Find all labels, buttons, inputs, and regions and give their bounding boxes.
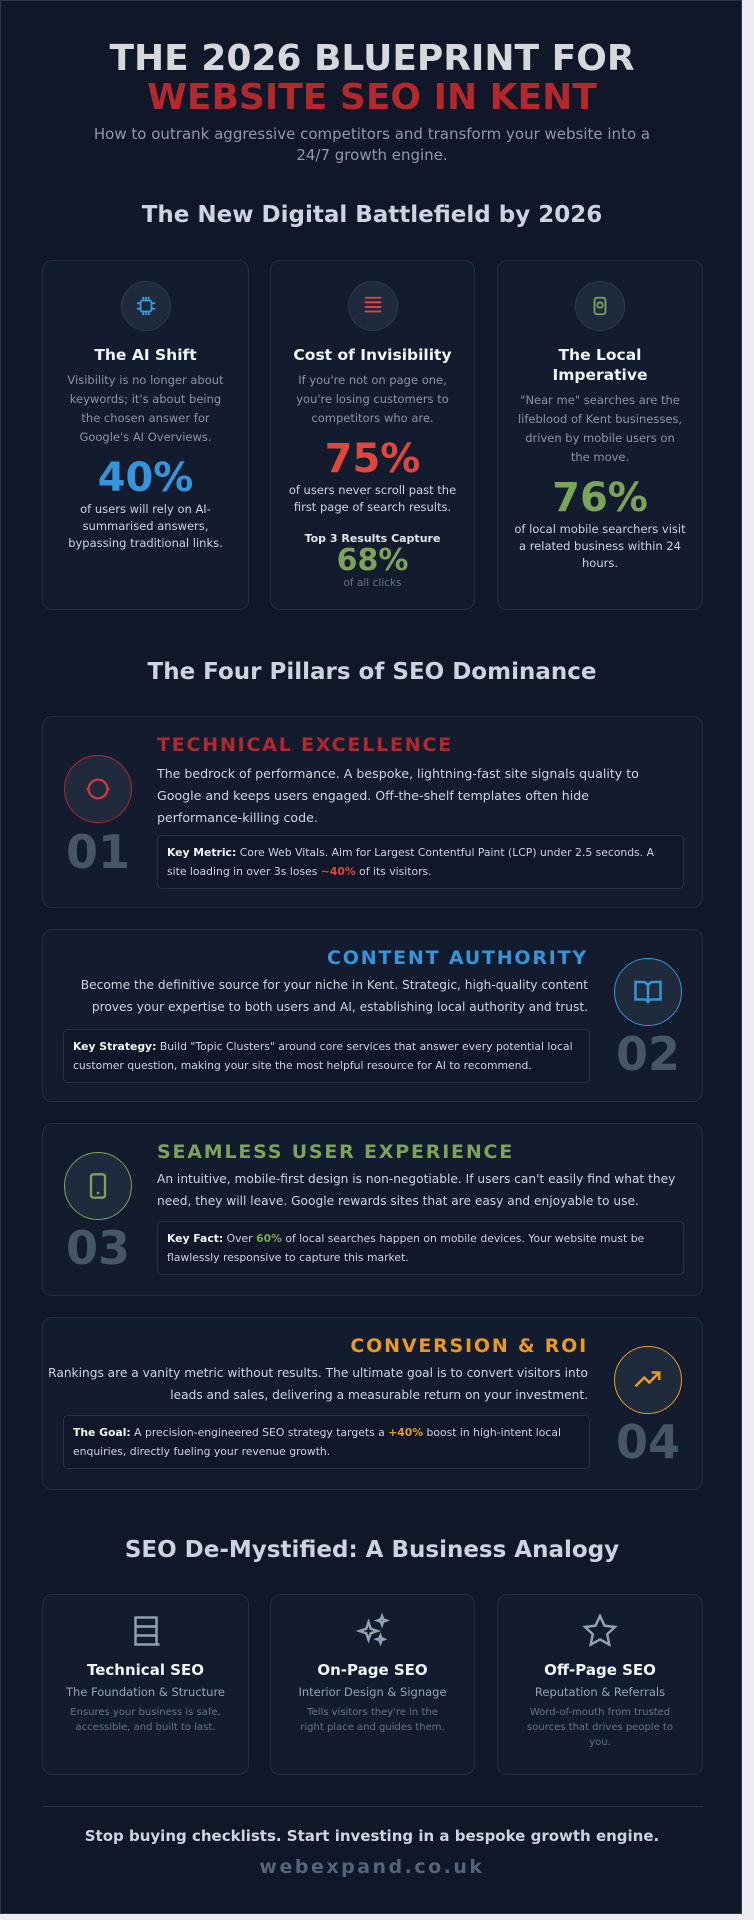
pillar 2: content authority: CONTENT AUTHORITY (327, 947, 588, 969)
card: cost of invisibility: Top 3 Results Capture (305, 532, 440, 545)
heading: analogy: SEO De-Mystified: A Business Analogy (125, 1537, 619, 1563)
icon: sparkles (356, 1613, 390, 1646)
card: local imperative (497, 260, 703, 610)
pillar 2: content authority (42, 929, 703, 1102)
icon: list (348, 281, 398, 331)
pillar 3: seamless UX: SEAMLESS USER EXPERIENCE (157, 1141, 514, 1163)
analogy: off-page SEO: Reputation & Referrals (535, 1685, 665, 1699)
pillar 4: conversion & ROI (42, 1317, 703, 1490)
card: cost of invisibility: Cost of Invisibility (293, 346, 452, 364)
title: WEBSITE SEO IN KENT (147, 77, 597, 118)
card: cost of invisibility (270, 260, 475, 610)
icon: star (582, 1613, 618, 1647)
subtitle: How to outrank aggressive competitors and transform your website into a 24/7 growth engine. (94, 125, 650, 164)
card: local imperative: of local mobile searchers visit a related business within 24 hours. (514, 522, 686, 570)
icon: book (614, 958, 682, 1026)
card: AI shift: The AI Shift (94, 346, 197, 364)
analogy: technical SEO: Technical SEO (87, 1661, 204, 1679)
icon: shelves (134, 1616, 160, 1646)
pillar 1: technical excellence: Key Metric: Core Web Vitals. Aim for Largest Contentful Paint (LCP) under 2.5 seconds. A site loading in over 3s loses ~40% of its visitors. (167, 846, 654, 878)
number 03: 03 (66, 1221, 130, 1275)
title (109, 38, 635, 118)
card: cost of invisibility: of users never scroll past the first page of search results. (289, 483, 456, 514)
number 02: 02 (616, 1027, 680, 1081)
pillar 2: content authority: Become the definitive source for your niche in Kent. Strategic, high-quality content proves your expertise to both users and AI, establishing local authority and trust. (81, 978, 588, 1014)
pillar 3: seamless UX: Key Fact: Over 60% of local searches happen on mobile devices. Your website must be flawlessly responsive to capture this market. (167, 1232, 644, 1264)
card: AI shift: of users will rely on AI-summarised answers, bypassing traditional links. (68, 502, 223, 550)
card: local imperative: The Local (558, 346, 642, 364)
heading: four pillars: The Four Pillars of SEO Dominance (148, 659, 596, 685)
icon: trend (614, 1346, 682, 1414)
pillar 1: technical excellence (42, 716, 703, 908)
card: cost of invisibility: of all clicks (344, 577, 402, 589)
analogy: technical SEO (42, 1594, 249, 1775)
icon: phone location (575, 281, 625, 331)
pillar 4: conversion & ROI: CONVERSION & ROI (350, 1335, 588, 1357)
analogy: on-page SEO: On-Page SEO (317, 1661, 428, 1679)
analogy: off-page SEO: Off-Page SEO (544, 1661, 656, 1679)
number 01: 01 (66, 825, 130, 879)
pillar 3: seamless UX: An intuitive, mobile-first design is non-negotiable. If users can't easily find what they need, they will leave. Google rewards sites that are easy and enjoyable to use. (157, 1172, 675, 1208)
number 04: 04 (616, 1415, 680, 1469)
heading: battlefield: The New Digital Battlefield by 2026 (142, 202, 602, 228)
icon: phone (64, 1152, 132, 1220)
analogy: on-page SEO: Interior Design & Signage (298, 1685, 447, 1699)
pillar 2: content authority: Key Strategy: Build "Topic Clusters" around core services that answer every potential local customer question, making your site the most helpful resource for AI to recommend. (73, 1040, 573, 1072)
footer url: webexpand.co.uk (259, 1856, 485, 1878)
card: AI shift: 40% (98, 455, 193, 501)
analogy: technical SEO: The Foundation & Structure (66, 1685, 225, 1699)
icon: chip (120, 281, 170, 331)
card: cost of invisibility: If you're not on page one, you're losing customers to competitors who are. (296, 373, 449, 425)
analogy: on-page SEO: Tells visitors they're in the right place and guides them. (300, 1707, 445, 1733)
card: AI shift (42, 260, 249, 610)
analogy: off-page SEO (497, 1594, 703, 1775)
analogy: technical SEO: Ensures your business is safe, accessible, and built to last. (70, 1707, 221, 1733)
card: cost of invisibility: 68% (337, 543, 408, 578)
card: AI shift: Visibility is no longer about keywords; it's about being the chosen answer for Google's AI Overviews. (67, 373, 224, 444)
title: THE 2026 BLUEPRINT FOR (109, 38, 635, 79)
analogy: off-page SEO: Word-of-mouth from trusted sources that drives people to you. (527, 1707, 673, 1748)
card: local imperative: 76% (552, 475, 648, 521)
pillar 3: seamless UX (42, 1123, 703, 1296)
pillar 4: conversion & ROI: Rankings are a vanity metric without results. The ultimate goal is to convert visitors into leads and sales, delivering a measurable return on your investment. (48, 1366, 588, 1402)
analogy: on-page SEO (270, 1594, 475, 1775)
card: cost of invisibility: 75% (325, 436, 420, 482)
footer tagline: Stop buying checklists. Start investing in a bespoke growth engine. (85, 1827, 659, 1845)
icon: circle (64, 755, 132, 823)
pillar 4: conversion & ROI: The Goal: A precision-engineered SEO strategy targets a +40% boost in high-intent local enquiries, directly fueling your revenue growth. (73, 1426, 561, 1458)
pillar 1: technical excellence: TECHNICAL EXCELLENCE (157, 734, 453, 756)
card: local imperative: "Near me" searches are the lifeblood of Kent businesses, driven by mobile users on the move. (518, 393, 682, 464)
card: local imperative: Imperative (553, 366, 647, 384)
pillar 1: technical excellence: The bedrock of performance. A bespoke, lightning-fast site signals quality to Google and keeps users engaged. Off-the-shelf templates often hide performance-killing code. (157, 766, 639, 825)
